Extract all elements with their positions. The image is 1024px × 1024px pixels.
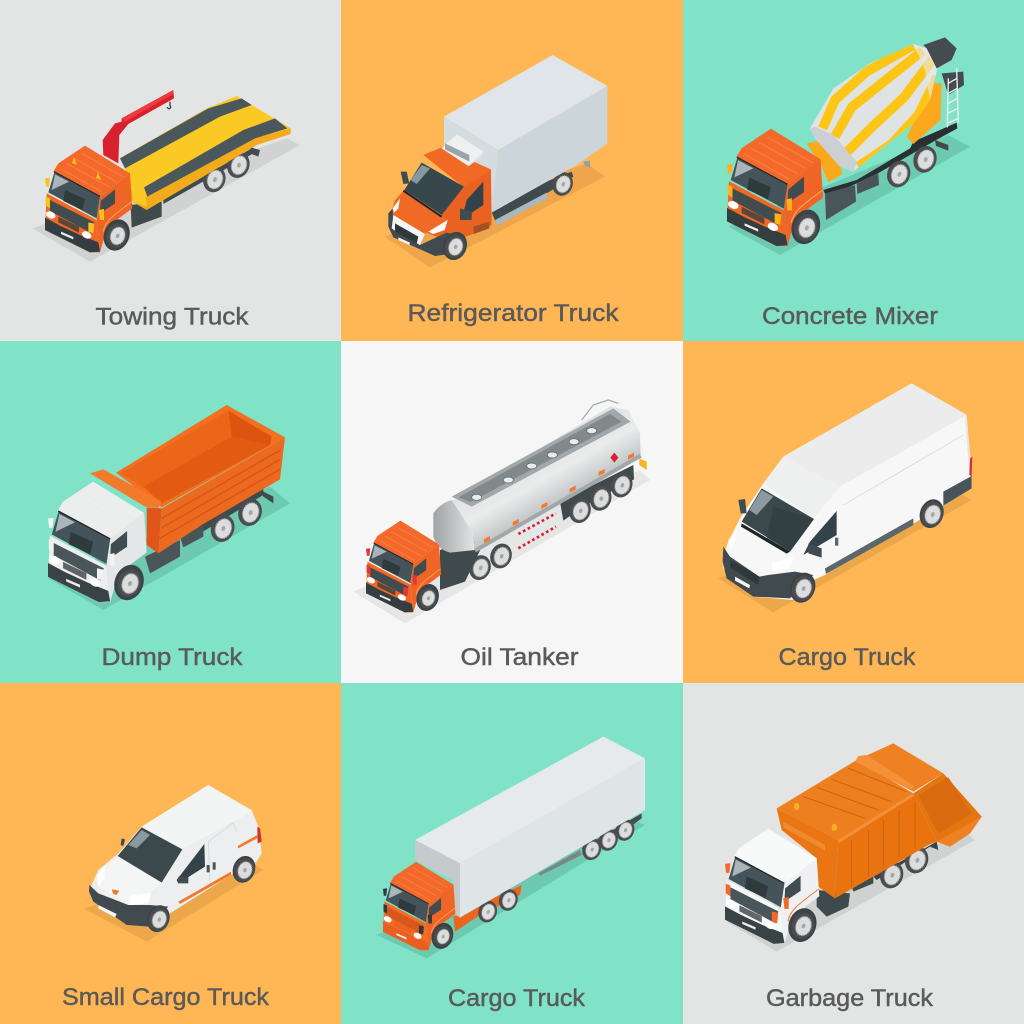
- panel: cargo van: [683, 341, 1024, 683]
- garbage body: [777, 743, 982, 898]
- truck: refrigerator truck: [385, 55, 607, 267]
- crane: [103, 90, 174, 163]
- cab: [366, 521, 443, 614]
- label: Refrigerator Truck: [408, 300, 619, 327]
- cab: [725, 829, 821, 946]
- panel: small cargo truck: [0, 683, 341, 1024]
- label: Dump Truck: [102, 644, 243, 671]
- truck: small cargo van: [83, 785, 263, 942]
- truck: concrete mixer: [727, 37, 970, 255]
- panel: garbage truck: [683, 683, 1024, 1024]
- flatbed: [120, 96, 291, 210]
- drum: [810, 37, 957, 172]
- truck: cargo van: [718, 383, 972, 612]
- cooling unit: [442, 134, 483, 166]
- label: Cargo Truck: [448, 985, 586, 1012]
- cab: [388, 147, 492, 263]
- truck: semi cargo truck: [377, 737, 645, 958]
- cab: [727, 129, 825, 248]
- cab: [383, 862, 457, 952]
- ladder: [947, 68, 958, 127]
- panel: refrigerator truck: [341, 0, 683, 341]
- dump body: [90, 405, 285, 553]
- refrigerated box: [444, 55, 607, 213]
- tank: [433, 400, 641, 553]
- side panel with reflectors: [515, 508, 558, 551]
- cab: [45, 146, 134, 254]
- label: Cargo Truck: [778, 644, 916, 671]
- truck: oil tanker: [353, 400, 650, 623]
- panel: concrete mixer: [683, 0, 1024, 341]
- van body: [89, 785, 262, 935]
- label: Garbage Truck: [766, 985, 934, 1012]
- truck: dump truck: [48, 405, 290, 610]
- truck: garbage truck: [725, 743, 982, 952]
- panel: oil tanker: [341, 341, 683, 683]
- label: Towing Truck: [96, 304, 249, 330]
- panel: semi cargo truck: [341, 683, 683, 1024]
- cab: [48, 482, 149, 604]
- label: Oil Tanker: [460, 644, 578, 671]
- trailer: [415, 737, 645, 918]
- van body: [723, 383, 972, 606]
- truck: towing truck: [32, 90, 300, 262]
- label: Small Cargo Truck: [62, 984, 270, 1011]
- mixer supports: [807, 140, 843, 182]
- panel: dump truck: [0, 341, 341, 683]
- panel: towing truck: [0, 0, 341, 341]
- label: Concrete Mixer: [762, 303, 938, 330]
